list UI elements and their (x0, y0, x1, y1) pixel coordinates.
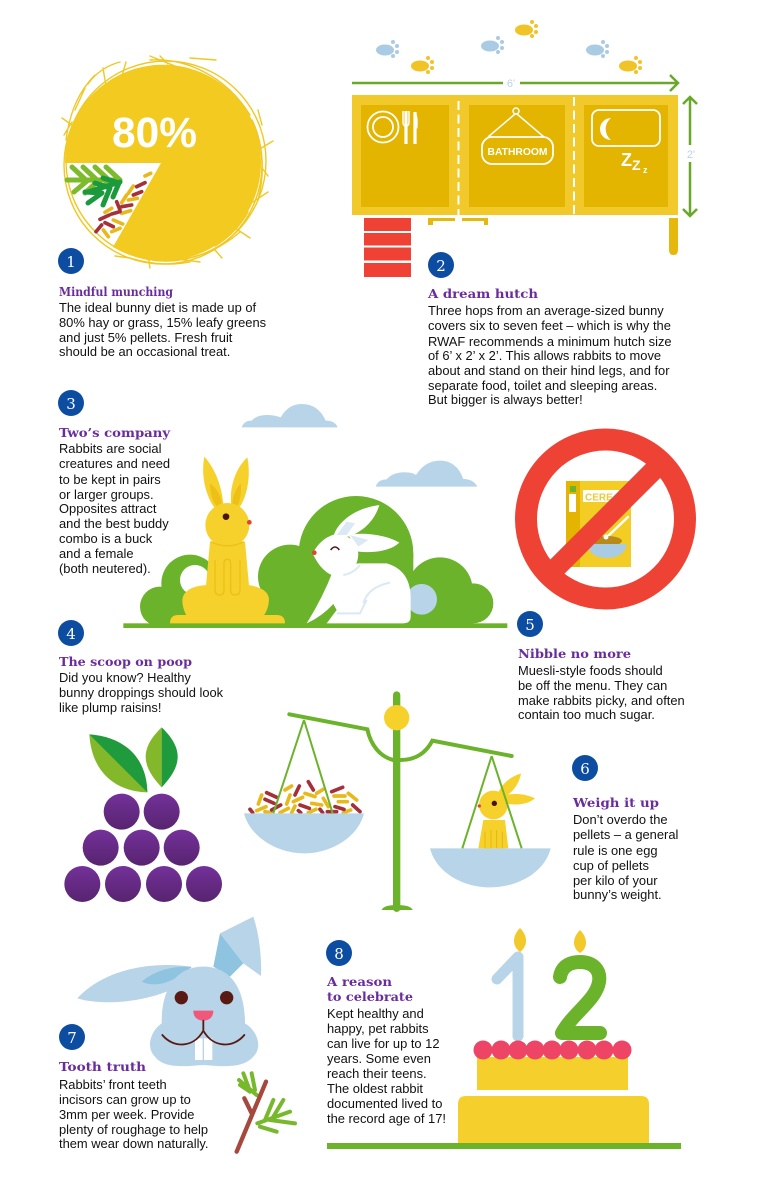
prohibition ring (526, 440, 685, 598)
body text: and a female (59, 546, 134, 561)
scale strings (273, 720, 522, 848)
bottom tier (458, 1096, 649, 1143)
hutch legs (428, 218, 678, 255)
body text: Muesli-style foods should (518, 663, 663, 678)
hay scribble (62, 56, 273, 268)
body text: incisors can grow up to (59, 1092, 191, 1107)
panel: weigh it up text (572, 796, 678, 902)
raisins (64, 794, 222, 902)
badge 1: 1 (66, 253, 76, 271)
body text: creatures and need (59, 456, 170, 471)
heading: Two’s company (59, 426, 171, 440)
icon: moon sign and zzz (592, 110, 660, 175)
candle 2 (560, 962, 600, 1033)
scale stand (289, 695, 512, 910)
compartment: sleep (584, 105, 668, 207)
body text: be off the menu. They can (518, 678, 667, 693)
compartment: food (361, 105, 449, 207)
body text: Kept healthy and (327, 1006, 424, 1021)
panel: two's company text (59, 426, 171, 576)
eyes (175, 991, 233, 1004)
badge 8: 8 (334, 945, 344, 963)
body text: pellets – a general (573, 827, 678, 842)
pie slice (65, 65, 261, 261)
illustration: no cereal sign (526, 440, 685, 598)
body text: 3mm per week. Provide (59, 1107, 194, 1122)
icon: dark green herb (85, 178, 120, 205)
candle 1 (497, 957, 518, 1036)
left pan (244, 813, 364, 853)
body text: and the best buddy (59, 516, 169, 531)
badge 2 (428, 252, 454, 278)
icing beads (474, 1040, 632, 1060)
badge 6: 6 (580, 760, 590, 778)
icon: plate and cutlery (368, 111, 417, 144)
panel: mindful munching text (59, 285, 266, 359)
body text: The oldest rabbit (327, 1081, 423, 1096)
pivot (384, 705, 409, 730)
ground (327, 1143, 681, 1149)
icon: twig with leaves (237, 1073, 295, 1152)
body text: should be an occasional treat. (59, 344, 230, 359)
cereal box: CERE (585, 492, 613, 504)
illustration: birthday cake (327, 928, 681, 1149)
head (150, 967, 258, 1066)
ground (123, 623, 507, 628)
arrow: 2 feet height (683, 97, 697, 216)
blue tail (406, 584, 437, 615)
body text: and just 5% pellets. Fresh fruit (59, 330, 233, 345)
body text: about and stand on their hind legs, and for (428, 363, 670, 378)
body text: 80% hay or grass, 15% leafy greens (59, 315, 266, 330)
label: 80%: 80% (112, 109, 197, 157)
panel: scoop on poop text (59, 655, 224, 715)
teeth (195, 1038, 212, 1060)
icon: light green herb (67, 167, 120, 193)
body text: But bigger is always better! (428, 392, 583, 407)
icon: moon sign and zzz: Z (632, 157, 641, 173)
badge 8 (326, 940, 352, 966)
body text: the record age of 17! (327, 1111, 446, 1126)
badge 4 (58, 620, 84, 646)
right pan (430, 848, 551, 887)
heading: The scoop on poop (59, 655, 192, 669)
body text: years. Some even (327, 1051, 431, 1066)
illustration: blue rabbit head (77, 917, 261, 1066)
body text: per kilo of your (573, 873, 658, 888)
panel: tooth truth text (59, 1060, 209, 1151)
paw blue 3 (586, 40, 609, 58)
body text: RWAF recommends a minimum hutch size (428, 334, 672, 349)
arrow: 2 feet height: 2' (687, 149, 695, 161)
body text: (both neutered). (59, 561, 151, 576)
body text: bunny droppings should look (59, 685, 224, 700)
body text: separate food, toilet and sleeping areas. (428, 378, 657, 393)
illustration: balance scale (244, 695, 551, 910)
paw yellow 1 (411, 56, 434, 74)
pellets (96, 173, 151, 237)
badge 5: 5 (525, 616, 535, 634)
body text: Did you know? Healthy (59, 670, 191, 685)
prohibition slash (553, 467, 657, 571)
white rabbit (307, 505, 411, 623)
body text: Don’t overdo the (573, 812, 668, 827)
body text: bunny’s weight. (573, 887, 662, 902)
panel: dream hutch text (427, 287, 672, 407)
heading: Nibble no more (518, 647, 631, 661)
badge 7: 7 (67, 1029, 77, 1047)
body text: them wear down naturally. (59, 1136, 209, 1151)
body text: or larger groups. (59, 487, 154, 502)
chart: 80% hay pie (62, 56, 273, 268)
badge 4: 4 (66, 625, 76, 643)
leaves (239, 1073, 295, 1132)
illustration: hutch (352, 95, 678, 277)
small rabbit on scale (478, 773, 535, 855)
badge 1 (58, 248, 84, 274)
icon: paw prints (376, 20, 642, 74)
icon: bathroom sign: BATHROOM (488, 147, 548, 158)
body text: make rabbits picky, and often (518, 693, 685, 708)
illustration: rabbits in bushes (123, 404, 507, 628)
badge 3 (58, 390, 84, 416)
heading: Mindful munching (59, 285, 174, 299)
nose (193, 1011, 213, 1021)
cloud left (242, 404, 338, 427)
paw yellow 3 (619, 56, 642, 74)
illustration: raisins and leaves (64, 727, 222, 902)
yellow rabbit (170, 457, 285, 623)
ramp (364, 218, 411, 277)
leaf left (89, 734, 147, 792)
icon: bathroom sign (482, 108, 553, 164)
body text: of 6’ x 2’ x 2’. This allows rabbits to move (428, 348, 661, 363)
body text: documented lived to (327, 1096, 442, 1111)
body text: happy, pet rabbits (327, 1021, 429, 1036)
body text: Opposites attract (59, 501, 157, 516)
ear right (220, 917, 261, 976)
body text: combo is a buck (59, 531, 153, 546)
cloud right (376, 461, 477, 487)
icon: moon sign and zzz: z (643, 165, 648, 175)
body text: to be kept in pairs (59, 472, 161, 487)
hutch frame (352, 95, 678, 215)
paw blue 2 (481, 36, 504, 54)
ear left (77, 965, 192, 1002)
panel: reason to celebrate text (326, 975, 446, 1126)
paw blue 1 (376, 40, 399, 58)
leaf right (146, 727, 178, 787)
top tier (477, 1057, 628, 1090)
cereal box (566, 481, 631, 567)
flames (514, 928, 586, 953)
arrow: 6 feet width: 6' (507, 78, 515, 90)
body text: The ideal bunny diet is made up of (59, 300, 256, 315)
compartment: bathroom (469, 105, 565, 207)
body text: covers six to seven feet – which is why the (428, 318, 671, 333)
body text: cup of pellets (573, 858, 649, 873)
body text: rule is one egg (573, 843, 658, 858)
body text: reach their teens. (327, 1066, 427, 1081)
heading: to celebrate (327, 990, 413, 1004)
body text: plenty of roughage to help (59, 1122, 208, 1137)
body text: contain too much sugar. (518, 707, 655, 722)
body text: Three hops from an average-sized bunny (428, 303, 664, 318)
body text: Rabbits are social (59, 441, 161, 456)
badge 2: 2 (436, 257, 446, 275)
icon: moon sign and zzz: Z (621, 150, 632, 170)
twig (237, 1082, 266, 1152)
heading: A dream hutch (427, 287, 538, 301)
mouth (162, 1021, 244, 1045)
body text: like plump raisins! (59, 700, 161, 715)
arrow: 6 feet width (352, 75, 678, 91)
heading: Tooth truth (59, 1060, 146, 1074)
pellets on scale (250, 782, 360, 813)
bushes (140, 496, 493, 627)
body text: Rabbits’ front teeth (59, 1077, 167, 1092)
badge 7 (59, 1024, 85, 1050)
badge 3: 3 (66, 395, 76, 413)
badge 5 (517, 611, 543, 637)
badge 6 (572, 755, 598, 781)
body text: can live for up to 12 (327, 1036, 440, 1051)
panel: nibble no more text (518, 647, 685, 722)
heading: A reason (326, 975, 392, 989)
paw yellow 2 (515, 20, 538, 38)
heading: Weigh it up (572, 796, 659, 810)
